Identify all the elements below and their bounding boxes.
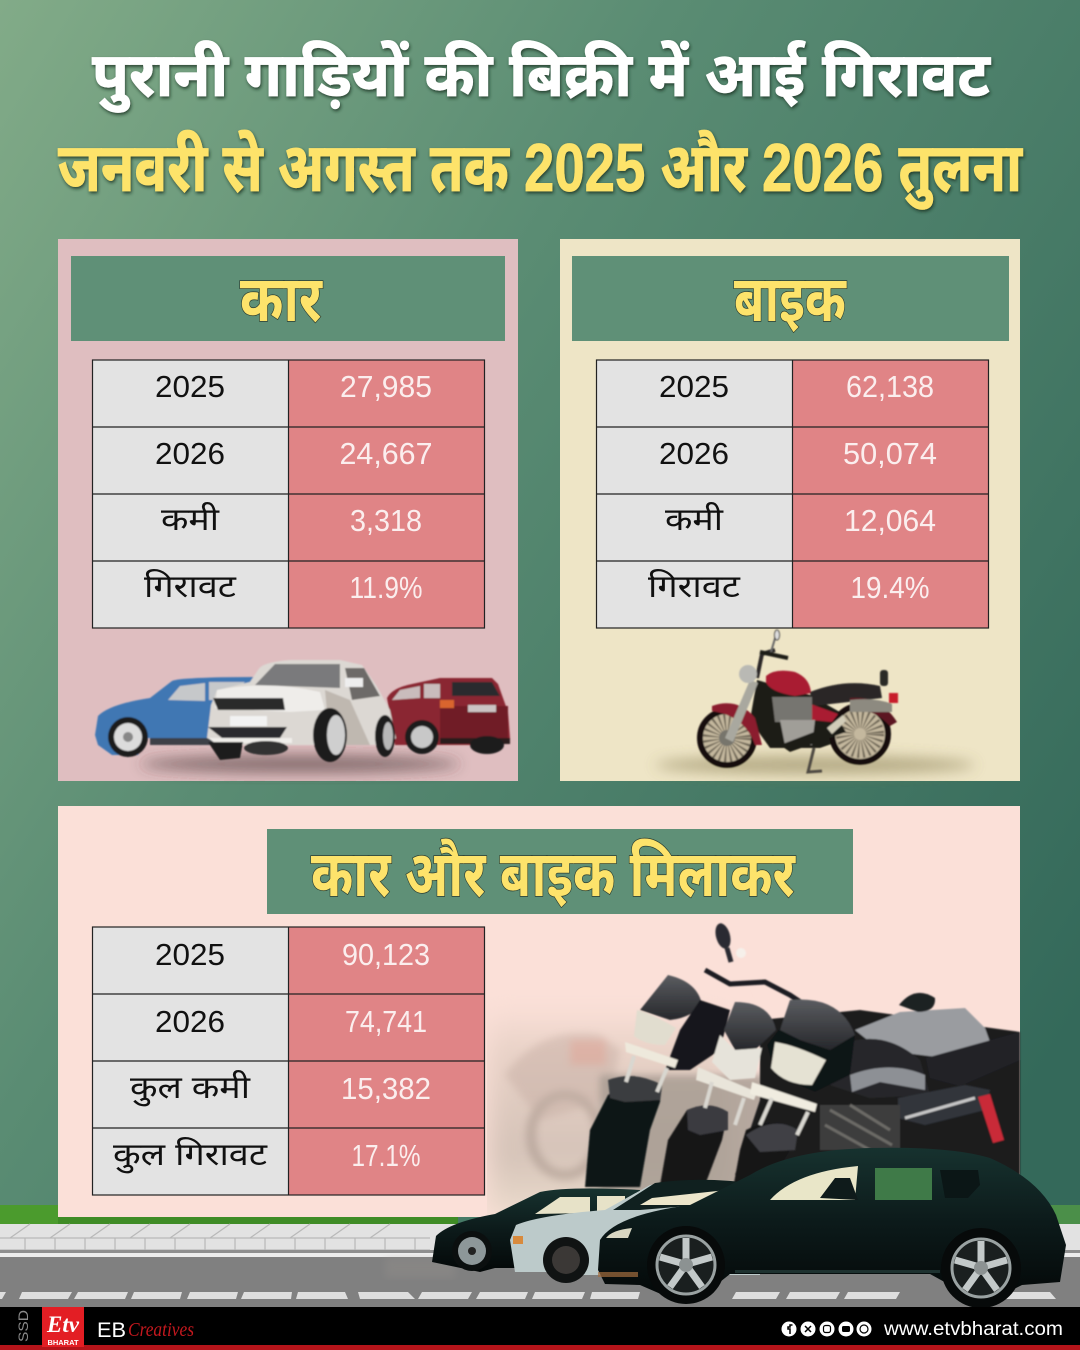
- bike 1: [585, 1080, 662, 1187]
- dark car left: [432, 1188, 640, 1272]
- car data table: 3,318: [350, 503, 422, 538]
- combined data table: कुल गिरावट: [113, 1137, 269, 1173]
- logo: ETV Bharat: [42, 1307, 84, 1347]
- logo: ETV Bharat: Etv: [46, 1312, 80, 1337]
- car data table: कमी: [161, 502, 220, 537]
- illustration: red motorcycle: [655, 630, 975, 774]
- car panel heading: कार: [240, 263, 323, 335]
- blue car: [95, 677, 262, 757]
- title: पुरानी गाड़ियों की बिक्री में आई गिरावट: [92, 40, 992, 113]
- red car: [387, 678, 510, 754]
- rear seats: [855, 1008, 990, 1058]
- panel: car: [58, 239, 518, 781]
- spring: [978, 1094, 1004, 1143]
- logo: ETV Bharat: BHARAT: [47, 1338, 79, 1347]
- car data table: 2025: [155, 369, 225, 404]
- bike 3: [734, 1122, 798, 1183]
- combined data table: 74,741: [345, 1004, 427, 1039]
- fog background: [487, 1026, 724, 1214]
- tank: [830, 1039, 930, 1098]
- combined data table: 90,123: [342, 937, 430, 972]
- combined data table: 17.1%: [352, 1138, 420, 1173]
- combined panel heading: कार और बाइक मिलाकर: [311, 838, 796, 910]
- illustration: parked cars: [385, 1148, 1066, 1308]
- footer bar: [0, 1307, 1080, 1350]
- EB Creatives label: Creatives: [128, 1319, 194, 1341]
- bike data table: 50,074: [843, 436, 937, 471]
- panel: combined: [58, 806, 1020, 1217]
- street scene: [0, 1205, 1080, 1307]
- bike data table: [596, 360, 988, 628]
- combined data table: कुल कमी: [130, 1070, 251, 1106]
- main dark mass: [585, 922, 1020, 1187]
- car data table: 24,667: [340, 436, 432, 471]
- EB Creatives label: EB: [97, 1319, 126, 1342]
- illustration: parked motorcycles: [488, 922, 1020, 1217]
- bike data table: 2026: [659, 436, 729, 471]
- SSD label: SSD: [15, 1310, 31, 1342]
- white car: [207, 660, 396, 762]
- engine: [820, 1105, 900, 1150]
- white car middle: [510, 1180, 760, 1283]
- bike panel heading: बाइक: [734, 263, 847, 335]
- frame: [750, 680, 860, 748]
- combined data table: 2026: [155, 1004, 225, 1039]
- social icons: [782, 1322, 872, 1336]
- mirrors: [713, 922, 733, 950]
- combined data table: [92, 927, 484, 1195]
- road dashes: [0, 1292, 1056, 1299]
- side panel: [898, 1085, 990, 1125]
- bike data table: 12,064: [844, 503, 936, 538]
- car data table: गिरावट: [144, 569, 238, 604]
- bike data table: कमी: [665, 502, 724, 537]
- road fog: [385, 1257, 455, 1278]
- wheels: [703, 714, 751, 762]
- bike data table: 62,138: [846, 369, 934, 404]
- bike data table: गिरावट: [648, 569, 742, 604]
- combined data table: 15,382: [341, 1071, 431, 1106]
- bike 2: [660, 1105, 728, 1185]
- combined data table: 2025: [155, 937, 225, 972]
- EB Creatives label: [97, 1319, 194, 1342]
- car data table: [92, 360, 484, 628]
- car panel heading: [71, 256, 505, 341]
- illustration: three cars: [95, 660, 510, 773]
- bike panel heading: [572, 256, 1009, 341]
- panel: bike: [560, 239, 1020, 781]
- car data table: 27,985: [340, 369, 432, 404]
- website: www.etvbharat.com: [883, 1319, 1063, 1340]
- black car front: [598, 1148, 1066, 1308]
- car data table: 2026: [155, 436, 225, 471]
- car data table: 11.9%: [350, 570, 422, 605]
- bike data table: 19.4%: [850, 570, 930, 605]
- bike data table: 2025: [659, 369, 729, 404]
